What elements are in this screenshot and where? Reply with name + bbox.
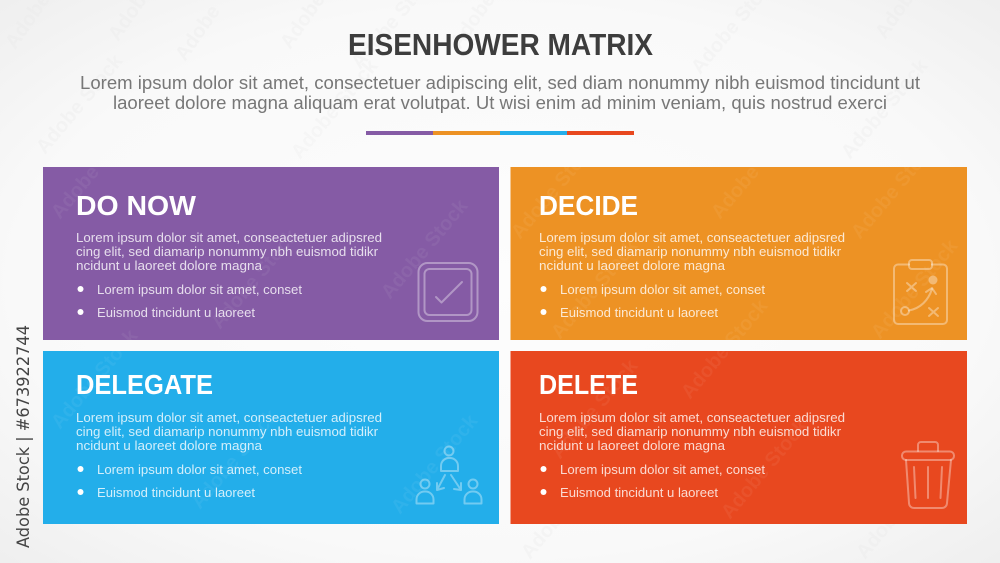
- panel: delete: [510, 351, 967, 524]
- heading: delete: DELETE: [539, 369, 638, 400]
- description: decide: [539, 231, 845, 273]
- subtitle text: [80, 73, 920, 113]
- bullet list: do now: Lorem ipsum dolor sit amet, conset: [97, 283, 303, 297]
- stock watermark pattern on panels: Adobe Stock: [387, 410, 483, 518]
- stock watermark pattern on panels: Adobe Stock: [187, 405, 283, 513]
- subtitle text: Lorem ipsum dolor sit amet, consectetuer adipiscing elit, sed diam nonummy nibh euismod tincidunt ut: [80, 73, 920, 93]
- description: delete: Lorem ipsum dolor sit amet, conseactetuer adipsred: [539, 411, 845, 425]
- stock watermark pattern on panels: Adobe Stock: [677, 295, 773, 403]
- icon: tactics clipboard: [894, 260, 947, 324]
- stock watermark pattern on background: Adobe: [852, 501, 909, 563]
- description: decide: cing elit, sed diamarip nonummy nbh euismod tidikr: [539, 245, 841, 259]
- icon: delegation people: [416, 446, 482, 504]
- stock watermark pattern on panels: Adobe Stock: [717, 415, 813, 523]
- icon: trash can: [902, 442, 954, 508]
- bullet list: delete: Lorem ipsum dolor sit amet, conset: [560, 463, 766, 477]
- stock watermark pattern on panels: Adobe Stock: [547, 355, 643, 463]
- icon: checkbox: [418, 263, 478, 321]
- panel: do now: [43, 167, 499, 340]
- description: delete: ncidunt u laoreet dolore magna: [539, 439, 725, 453]
- stock watermark pattern on panels: Adobe Stock: [47, 325, 143, 433]
- bullet list: delete: Euismod tincidunt u laoreet: [560, 486, 719, 500]
- stock watermark pattern on panels: Adobe Stock: [47, 115, 143, 223]
- heading: do now: DO NOW: [76, 190, 197, 221]
- four colour divider: [366, 131, 634, 135]
- vertical stock id label: Adobe Stock | #673922744: [14, 325, 34, 548]
- bullet list: decide: [540, 283, 766, 320]
- stock watermark pattern on panels: Adobe Stock: [377, 195, 473, 303]
- bullet list: delegate: Euismod tincidunt u laoreet: [97, 486, 256, 500]
- stock watermark pattern on panels: [47, 115, 963, 523]
- description: do now: cing elit, sed diamarip nonummy nbh euismod tidikr: [76, 245, 378, 259]
- stock watermark pattern on panels: Adobe Stock: [847, 135, 943, 243]
- stock watermark pattern on panels: Adobe Stock: [867, 235, 963, 343]
- stock watermark pattern on background: Adobe: [517, 501, 574, 563]
- stock watermark pattern on panels: Adobe Stock: [207, 225, 303, 333]
- bullet list: delegate: Lorem ipsum dolor sit amet, conset: [97, 463, 303, 477]
- heading: delegate: DELEGATE: [76, 369, 213, 400]
- panel: decide: [510, 167, 967, 340]
- stock watermark pattern on background: Adobe: [171, 1, 225, 65]
- bullet list: decide: Lorem ipsum dolor sit amet, conset: [560, 283, 766, 297]
- stock watermark pattern on background: Adobe Stock: [32, 50, 128, 158]
- description: delegate: ncidunt u laoreet dolore magna: [76, 439, 262, 453]
- description: delegate: [76, 411, 382, 453]
- stock watermark pattern on panels: Adobe Stock: [707, 115, 803, 223]
- description: delegate: cing elit, sed diamarip nonummy nbh euismod tidikr: [76, 425, 378, 439]
- stock watermark pattern on panels: Adobe Stock: [507, 135, 603, 243]
- stock watermark pattern on panels: Adobe Stock: [547, 235, 643, 343]
- description: do now: ncidunt u laoreet dolore magna: [76, 259, 262, 273]
- panel: delegate: [43, 351, 499, 524]
- title: EISENHOWER MATRIX: [348, 27, 653, 62]
- bullet list: decide: Euismod tincidunt u laoreet: [560, 306, 719, 320]
- subtitle text: laoreet dolore magna aliquam erat volutpat. Ut wisi enim ad minim veniam, quis nostrud exerci: [113, 93, 887, 113]
- description: decide: Lorem ipsum dolor sit amet, conseactetuer adipsred: [539, 231, 845, 245]
- heading: decide: DECIDE: [539, 190, 638, 221]
- description: delete: cing elit, sed diamarip nonummy nbh euismod tidikr: [539, 425, 841, 439]
- stock watermark pattern on background: Adobe Stock: [287, 55, 383, 163]
- description: decide: ncidunt u laoreet dolore magna: [539, 259, 725, 273]
- description: do now: Lorem ipsum dolor sit amet, conseactetuer adipsred: [76, 231, 382, 245]
- bullet list: delegate: [78, 463, 303, 500]
- bullet list: delete: [540, 463, 766, 500]
- stock watermark pattern on background: Adobe Stock: [837, 55, 933, 163]
- description: delegate: Lorem ipsum dolor sit amet, conseactetuer adipsred: [76, 411, 382, 425]
- bullet list: do now: Euismod tincidunt u laoreet: [97, 306, 256, 320]
- description: delete: [539, 411, 845, 453]
- bullet list: do now: [78, 283, 303, 320]
- description: do now: [76, 231, 382, 273]
